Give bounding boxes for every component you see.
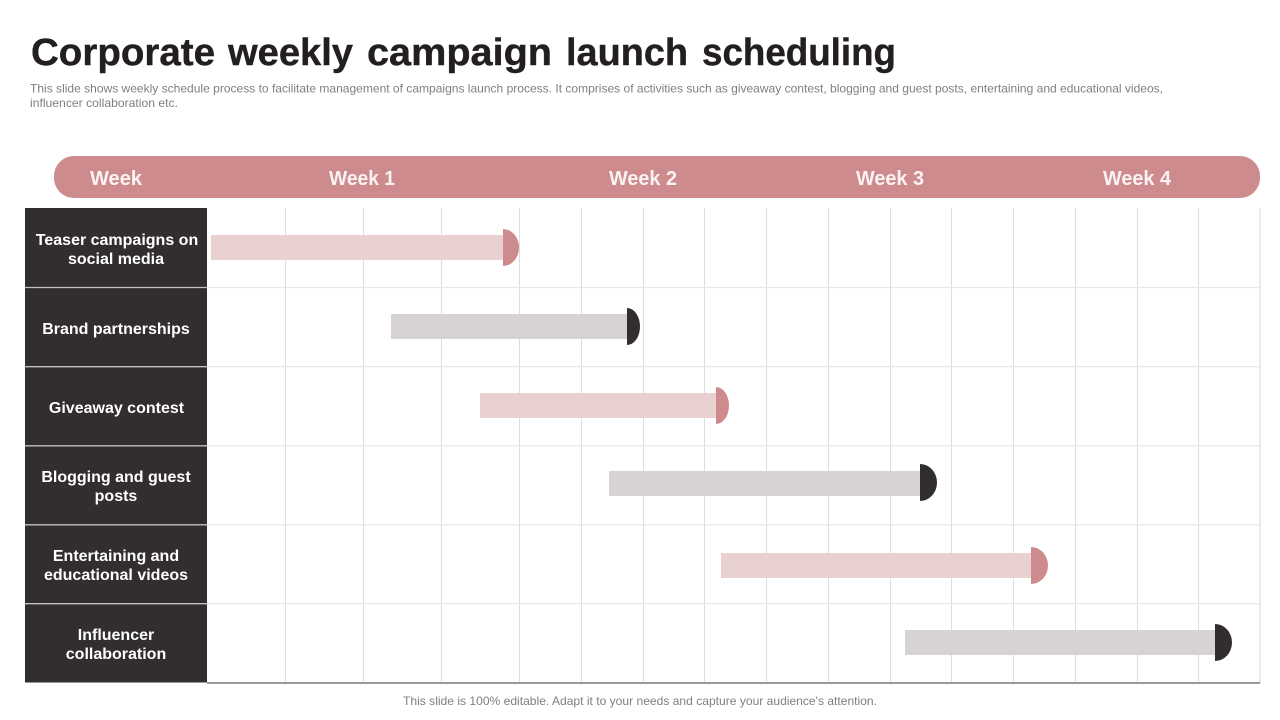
subtitle text block: This slide shows weekly schedule process to facilitate management of campaigns launch process. It comprises of activities such as giveaway contest, blogging and guest posts, entertaining and educational videos,: [30, 82, 1163, 96]
week header band: Week 3: [856, 168, 924, 190]
row label: Entertaining and educational videos: [44, 548, 188, 584]
bar: Entertaining and educational videos: [721, 547, 1048, 584]
bar: Brand partnerships: [391, 308, 640, 345]
row label: Influencer collaboration: [66, 627, 166, 663]
row label: Blogging and guest posts: posts: [95, 488, 137, 505]
schedule grid: [207, 208, 1260, 683]
title: Corporate: [31, 32, 215, 74]
row label: Influencer collaboration: Influencer: [78, 627, 154, 644]
subtitle text block: influencer collaboration etc.: [30, 96, 178, 110]
row label: Blogging and guest posts: Blogging and guest: [41, 469, 191, 486]
title: campaign: [367, 32, 552, 74]
week header band: Week 2: [609, 168, 677, 190]
title: scheduling: [702, 32, 896, 74]
week header band: Week: [90, 168, 143, 190]
row label: Entertaining and educational videos: educational videos: [44, 567, 188, 584]
row label: Teaser campaigns on social media: Teaser campaigns on: [36, 232, 198, 249]
title: launch: [566, 32, 688, 74]
bar: Influencer collaboration: [905, 624, 1232, 661]
row label: Entertaining and educational videos: Entertaining and: [53, 548, 179, 565]
row label: Teaser campaigns on social media: [36, 232, 198, 268]
row labels column: [25, 208, 207, 682]
bar: Teaser campaigns on social media: [211, 229, 519, 266]
bar: Giveaway contest: [480, 387, 729, 424]
row label: Giveaway contest: Giveaway contest: [49, 400, 185, 417]
row label: Influencer collaboration: collaboration: [66, 646, 166, 663]
bar: Blogging and guest posts: [609, 464, 937, 501]
row label: Brand partnerships: Brand partnerships: [42, 321, 190, 338]
footer note: This slide is 100% editable. Adapt it to your needs and capture your audience's attention.: [403, 694, 877, 708]
week header band: Week 1: [329, 168, 395, 190]
week header band: Week 4: [1103, 168, 1172, 190]
row label: Blogging and guest posts: [41, 469, 191, 505]
title: [31, 32, 896, 74]
subtitle text block: [30, 82, 1163, 110]
row label: Teaser campaigns on social media: social media: [68, 251, 164, 268]
week header band: [54, 156, 1260, 198]
title: weekly: [227, 32, 353, 74]
